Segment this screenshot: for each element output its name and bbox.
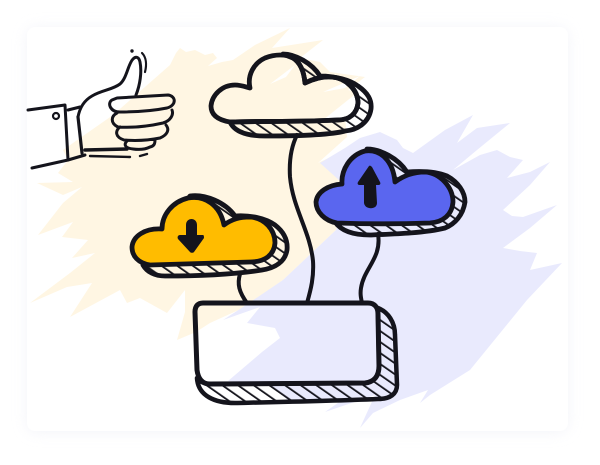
hand outline — [78, 57, 141, 117]
connector: top cloud to box — [290, 135, 313, 303]
brush stroke: lavender — [223, 115, 562, 428]
palm lower line — [90, 154, 147, 157]
icon: download arrow — [178, 219, 204, 253]
cloud: blue upload — [316, 149, 465, 235]
wrist — [78, 117, 82, 153]
motion lines — [142, 53, 146, 72]
fingers — [110, 95, 174, 149]
card shadow — [27, 28, 568, 432]
box — [195, 303, 397, 403]
connector: blue cloud to box — [361, 234, 379, 303]
connector: yellow cloud to box — [239, 274, 247, 303]
cloud back hatch — [335, 149, 465, 235]
thumb dot — [131, 50, 133, 52]
cloud back hatch — [230, 54, 371, 136]
cuff button — [53, 113, 59, 119]
brush stroke: cream — [30, 28, 365, 340]
cuff — [68, 107, 85, 160]
palm bottom — [85, 149, 127, 150]
box front — [195, 303, 379, 384]
box back hatch — [197, 308, 397, 403]
icon: thumbs up hand — [28, 50, 174, 168]
cloud face — [211, 55, 358, 122]
cloud face — [132, 197, 275, 265]
sleeve — [28, 105, 68, 168]
cloud: top cream — [211, 54, 371, 136]
cloud: yellow download — [132, 196, 287, 276]
panel: white card — [27, 27, 568, 431]
icon: upload arrow — [358, 166, 380, 208]
brush streak: white — [270, 65, 360, 121]
cloud back hatch — [143, 196, 287, 276]
cloud face — [316, 151, 453, 224]
